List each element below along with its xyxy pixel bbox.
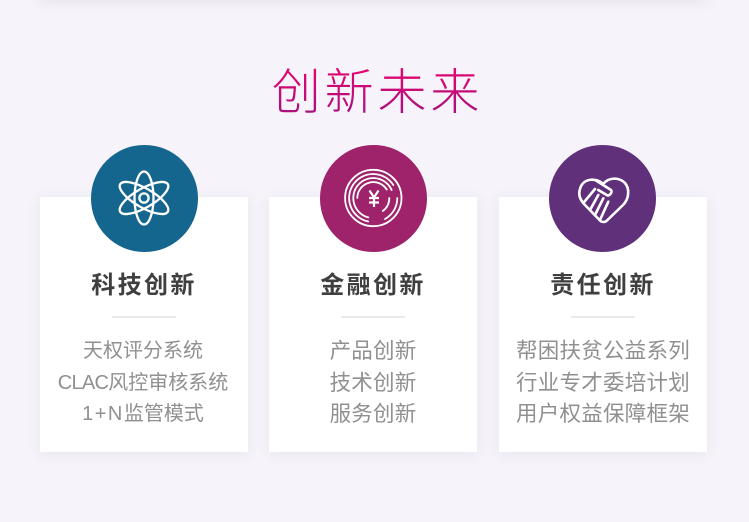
text block: finance items: 服务创新 [330,402,416,426]
text block: responsibility items: 行业专才委培计划 [516,371,690,395]
title: 创新未来 [272,66,483,120]
icon: handshake heart [549,145,656,252]
text block: responsibility items [516,339,690,426]
text block: technology items: 天权评分系统 [83,340,203,362]
text block: technology items [58,340,228,425]
text block: technology items: 1+N监管模式 [82,403,204,425]
heading: responsibility innovation: 责任创新 [550,272,656,299]
icon: yen coin [320,145,426,252]
heading: technology innovation: 科技创新 [91,272,197,299]
icon: atom [91,145,198,252]
panel: technology innovation [40,197,248,452]
text block: technology items: CLAC风控审核系统 [58,372,228,394]
text block: responsibility items: 帮困扶贫公益系列 [516,339,690,363]
text block: responsibility items: 用户权益保障框架 [516,402,690,426]
title [176,57,579,129]
panel: finance innovation [269,197,477,452]
text block: finance items: 技术创新 [330,371,416,395]
panel: responsibility innovation [499,197,707,452]
heading: finance innovation: 金融创新 [320,272,426,299]
text block: finance items [330,339,416,426]
text block: finance items: 产品创新 [330,339,416,363]
